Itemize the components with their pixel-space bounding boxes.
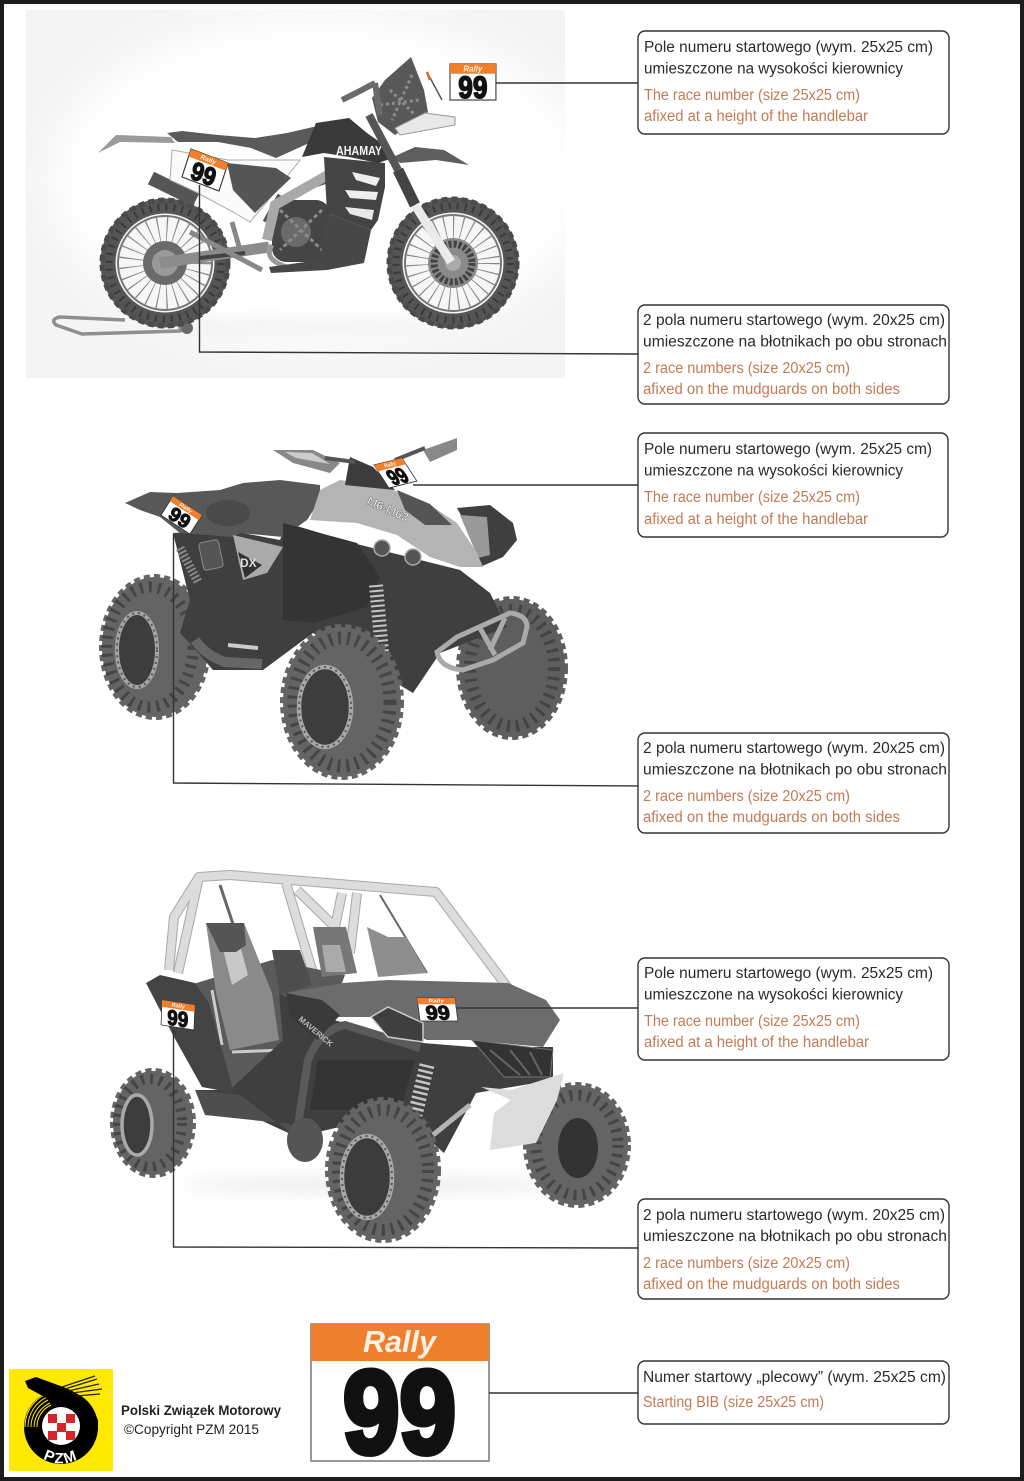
callout text: umieszczone na błotnikach po obu stronach (643, 1228, 947, 1245)
callout text: afixed at a height of the handlebar (644, 511, 868, 528)
callout text: The race number (size 25x25 cm) (644, 1013, 860, 1030)
rear wheel (102, 200, 228, 326)
callout text: afixed on the mudguards on both sides (643, 809, 900, 826)
rear panel and tail (98, 135, 175, 153)
motorcycle: AHAMAY (336, 143, 382, 158)
quad headlights (374, 540, 390, 556)
quad rear wheel (102, 577, 208, 717)
buggy left wheel (113, 1071, 193, 1175)
callout: quad handlebar number (638, 433, 948, 537)
race number: quad mudguard (159, 496, 202, 537)
connector: motorcycle mudguard (200, 185, 638, 354)
quad right fender (457, 505, 517, 567)
tank (302, 118, 396, 163)
connector: buggy mudguard (174, 1030, 638, 1248)
buggy rear panel (146, 975, 234, 1093)
callout: buggy handlebar number (638, 958, 949, 1060)
logo swoosh (25, 1377, 98, 1430)
race number: quad handlebar (374, 458, 419, 491)
callout text: 2 pola numeru startowego (wym. 20x25 cm) (643, 1207, 945, 1224)
buggy front wheel (328, 1100, 438, 1240)
panel: motorcycle photo (26, 10, 590, 378)
race number: buggy hood: 99 (424, 1001, 451, 1024)
callout text: afixed at a height of the handlebar (644, 108, 868, 125)
buggy lower body (195, 993, 553, 1153)
callout text: The race number (size 25x25 cm) (644, 489, 860, 506)
race number: buggy mudguard (161, 1000, 195, 1033)
race number: motorcycle handlebar: 99 (458, 70, 487, 105)
PZM logo (9, 1369, 113, 1471)
quad bike (102, 438, 565, 777)
callout text: 2 pola numeru startowego (wym. 20x25 cm) (643, 740, 945, 757)
callout text (644, 39, 933, 125)
callout text (643, 740, 947, 826)
organisation name: Polski Związek Motorowy (121, 1403, 281, 1418)
quad bike: DX (240, 556, 257, 570)
callout text: Numer startowy „plecowy” (wym. 25x25 cm) (643, 1369, 946, 1386)
exhaust (151, 178, 196, 200)
callout: quad mudguard numbers (638, 733, 949, 833)
race number: quad mudguard: 99 (164, 503, 195, 533)
callout text (643, 312, 947, 398)
quad front shock (376, 585, 382, 652)
logo checkers (48, 1414, 75, 1440)
callout text: umieszczone na błotnikach po obu stronach (643, 334, 947, 350)
callout text: Pole numeru startowego (wym. 25x25 cm) (644, 39, 933, 56)
callout text: umieszczone na błotnikach po obu stronach (643, 762, 947, 778)
callout text (644, 965, 933, 1051)
race number: quad handlebar: 99 (382, 463, 414, 490)
fairing and headlight (372, 57, 428, 135)
quad footrest (195, 640, 262, 664)
fork (369, 115, 398, 170)
large rally number plate: 99 (343, 1347, 456, 1479)
callout text: 2 race numbers (size 20x25 cm) (643, 1255, 850, 1272)
callout text: 2 race numbers (size 20x25 cm) (643, 788, 850, 805)
quad hood (310, 480, 483, 567)
quad body (173, 523, 507, 693)
race number: buggy hood: Rally (428, 999, 445, 1004)
race number: quad handlebar: Rally (383, 461, 399, 470)
callout text (644, 441, 932, 528)
callout text: umieszczone na wysokości kierownicy (644, 462, 903, 480)
buggy grille (472, 1040, 553, 1077)
race number: buggy mudguard: 99 (167, 1005, 189, 1032)
quad front fender panel (283, 523, 380, 623)
large rally number plate (311, 1324, 489, 1479)
connector: quad mudguard (174, 534, 638, 786)
callout: starting bib (638, 1361, 949, 1424)
callout text: afixed at a height of the handlebar (644, 1034, 869, 1051)
race number: motorcycle mudguard: 99 (187, 157, 219, 192)
buggy front shock (415, 1065, 427, 1115)
quad front wheel (283, 627, 401, 777)
race number: buggy hood (417, 998, 458, 1024)
buggy seats (206, 923, 357, 1052)
buggy skid plate (481, 1073, 564, 1150)
quad handlebar (273, 438, 457, 490)
callout text: 2 pola numeru startowego (wym. 20x25 cm) (643, 312, 945, 329)
paddock stand (54, 290, 187, 334)
large rally number plate: Rally (363, 1324, 438, 1359)
quad rear fender (125, 480, 320, 537)
front wheel (389, 199, 517, 327)
race number: motorcycle mudguard (181, 149, 228, 195)
callout text: umieszczone na wysokości kierownicy (644, 60, 903, 78)
side-by-side buggy (113, 875, 628, 1240)
callout: motorcycle mudguard numbers (638, 305, 949, 404)
buggy roll cage (169, 875, 508, 988)
quad rear shock (180, 548, 198, 582)
motorcycle (54, 57, 517, 334)
callout: buggy mudguard numbers (638, 1199, 949, 1299)
front fender (393, 147, 469, 165)
quad bike: M6-M63 (365, 494, 411, 525)
quad rear wheel far side (459, 599, 565, 737)
connector: quad handlebar (413, 484, 638, 486)
buggy right wheel (526, 1085, 628, 1205)
buggy windshield mesh (367, 927, 427, 977)
engine (272, 200, 330, 262)
race number: motorcycle mudguard: Rally (199, 154, 218, 167)
connector: motorcycle handlebar (496, 82, 638, 84)
callout text: Pole numeru startowego (wym. 25x25 cm) (644, 965, 933, 982)
callout text (643, 1207, 947, 1293)
skid plate (269, 213, 371, 273)
callout text: Starting BIB (size 25x25 cm) (643, 1394, 824, 1411)
buggy hood (286, 980, 560, 1047)
buggy cabin backdrop (190, 960, 345, 1100)
logo lettering: PZM (44, 1450, 76, 1464)
callout text: Pole numeru startowego (wym. 25x25 cm) (644, 441, 932, 458)
buggy headlight (371, 1007, 423, 1042)
seat (167, 127, 320, 158)
quad bumper (437, 613, 527, 670)
callout text: The race number (size 25x25 cm) (644, 87, 860, 104)
radiator shroud (324, 157, 385, 230)
callout: motorcycle handlebar number (638, 31, 949, 134)
copyright: ©Copyright PZM 2015 (124, 1422, 259, 1437)
buggy suspension arm (433, 1105, 470, 1135)
quad side panel (233, 535, 283, 580)
callout text: afixed on the mudguards on both sides (643, 1276, 900, 1293)
callout text (643, 1369, 946, 1411)
callout text: afixed on the mudguards on both sides (643, 381, 900, 398)
race number: quad mudguard: Rally (178, 502, 194, 515)
race number: buggy mudguard: Rally (171, 1003, 186, 1011)
callout text: umieszczone na wysokości kierownicy (644, 986, 903, 1004)
connector: buggy hood (457, 1007, 638, 1009)
race number: motorcycle handlebar: Rally (463, 64, 483, 73)
side-by-side buggy: MAVERICK (297, 1015, 335, 1049)
connector: starting bib (489, 1392, 638, 1394)
swingarm and frame (160, 247, 269, 263)
race number: motorcycle handlebar (450, 64, 496, 105)
callout text: 2 race numbers (size 20x25 cm) (643, 360, 850, 377)
